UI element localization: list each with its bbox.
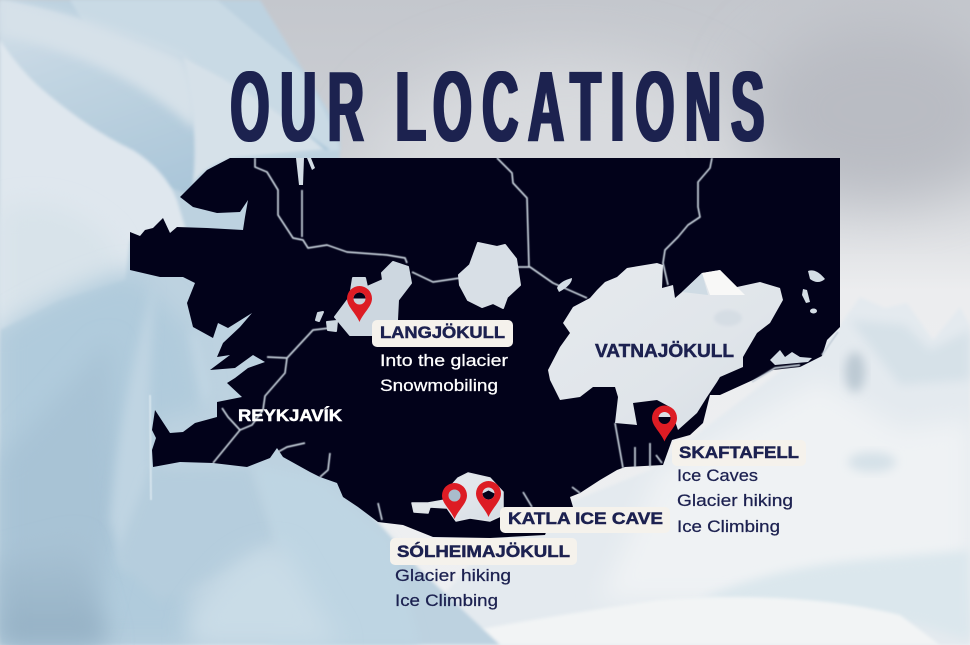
icon: pin solheimajokull	[442, 483, 467, 519]
location: skaftafell: SKAFTAFELL	[679, 443, 799, 462]
location: langjokull: Snowmobiling	[380, 377, 498, 395]
location: skaftafell: Ice Caves	[677, 467, 758, 485]
icon: pin langjokull	[347, 286, 372, 322]
location: langjokull	[372, 320, 513, 395]
location: katla ice cave	[500, 507, 670, 533]
map: rivers and roads	[213, 158, 838, 520]
location: solheimajokull: SÓLHEIMAJÖKULL	[397, 542, 570, 561]
location: katla ice cave: KATLA ICE CAVE	[508, 509, 663, 528]
map: glacier langjokull	[316, 262, 411, 335]
map: glacier myrdalsjokull and eyjafjallajokull	[412, 473, 503, 521]
title: OUR LOCATIONS	[230, 50, 764, 163]
map: lakes and islands	[296, 158, 825, 365]
location: solheimajokull: Ice Climbing	[395, 592, 498, 610]
icon: pin skaftafell	[652, 406, 677, 442]
map: glacier hofsjokull	[459, 243, 520, 308]
map label: reykjavik: REYKJAVÍK	[238, 406, 343, 425]
location: langjokull: Into the glacier	[380, 352, 509, 370]
location: skaftafell	[672, 440, 806, 536]
map: landmass silhouette	[130, 158, 840, 538]
location: skaftafell: Glacier hiking	[677, 492, 793, 510]
map: glacier vatnajokull	[548, 263, 783, 430]
icon: pin katla	[476, 481, 501, 517]
map label: vatnajokull: VATNAJÖKULL	[595, 341, 734, 361]
location: solheimajokull	[390, 538, 577, 610]
map of iceland	[130, 158, 840, 538]
location: langjokull: LANGJÖKULL	[380, 323, 505, 342]
location: skaftafell: Ice Climbing	[677, 518, 780, 536]
location: solheimajokull: Glacier hiking	[395, 567, 511, 585]
